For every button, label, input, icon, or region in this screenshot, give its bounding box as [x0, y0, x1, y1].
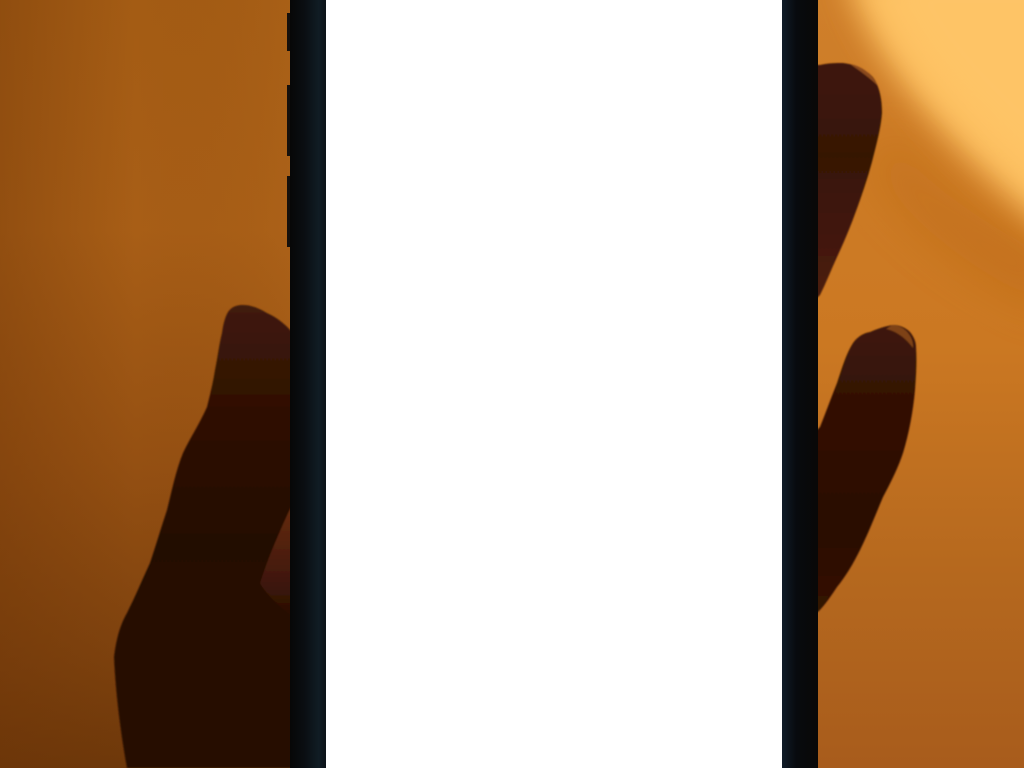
phone: right bezel: [782, 0, 818, 768]
lower fingernail highlight: [886, 325, 913, 348]
phone: blank white screen: [326, 0, 782, 768]
upper fingernail highlight: [850, 64, 878, 86]
finger gap: lit skin beside the phone: [260, 505, 292, 616]
background: right wall with light glow: [815, 0, 1024, 768]
right lower finger: [815, 325, 916, 612]
phone: side buttons: [287, 13, 291, 247]
right upper finger: [815, 63, 882, 300]
left hand silhouette: [114, 305, 292, 768]
background: left wall: [0, 0, 300, 768]
phone: left bezel: [290, 0, 326, 768]
